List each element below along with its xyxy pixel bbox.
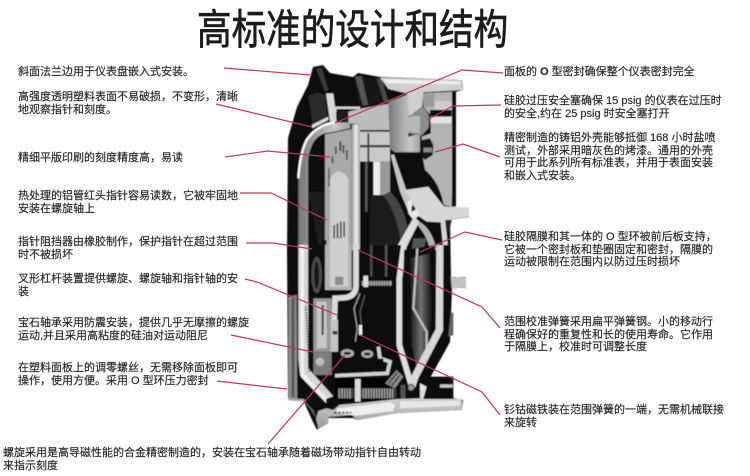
callout: overpressure plug <box>504 94 722 120</box>
grey casting <box>388 94 420 152</box>
callout: pointer <box>18 190 238 215</box>
overpressure plug <box>408 107 429 136</box>
callout: silicone diaphragm: 硅胶隔膜和其一体的 O 型环被前后板支持， <box>504 231 717 243</box>
rear wall <box>412 245 440 387</box>
callout: zero adjuster: 在塑料面板上的调零螺丝，无需移除面板即可 <box>18 362 238 374</box>
inner white tube <box>399 245 412 387</box>
leader: clear window <box>216 104 312 127</box>
gauge silhouette <box>287 65 469 430</box>
range screw <box>362 281 392 286</box>
leader: silicone diaphragm <box>420 232 502 252</box>
leader: front O-ring <box>335 70 503 123</box>
callout: range spring: 于隔膜上，校准时可调整长度 <box>504 341 647 353</box>
callout: die-cast case: 和嵌入式安装。 <box>504 170 581 182</box>
leader: zero adjuster <box>217 381 287 389</box>
pivot <box>408 384 414 391</box>
diaphragm <box>403 245 437 368</box>
callout: pointer: 热处理的铝管红头指针容易读数，它被牢固地 <box>18 190 238 202</box>
callout: silicone diaphragm: 它被一个密封板和垫圈固定和密封，隔膜的 <box>504 244 713 256</box>
callout: range spring: 范围校准弹簧采用扁平弹簧钢。小的移动行 <box>504 316 713 328</box>
lever tube <box>333 245 356 352</box>
callout: overpressure plug: 硅胶过压安全塞确保 15 psig 的仪表在过压时 <box>504 95 722 107</box>
callout: magnet: 来旋转 <box>504 417 537 429</box>
lower left shell <box>303 400 316 418</box>
leader: helix <box>268 355 345 444</box>
dial plate <box>325 129 352 250</box>
callout: helix: 来指示刻度 <box>3 460 58 472</box>
light grey ledge <box>348 103 391 130</box>
callout: fork lever: 装 <box>18 286 29 298</box>
callout: die-cast case: 可用于此系列所有标准表，并用于表面安装 <box>504 157 713 169</box>
spring brace <box>385 370 403 388</box>
L bracket <box>335 347 390 376</box>
callout: zero adjuster <box>18 362 238 387</box>
curved window <box>298 122 350 250</box>
callout: silicone diaphragm: 运动被限制在范围内以防过压时损坏 <box>504 256 680 268</box>
case fastener <box>422 138 433 160</box>
callout: jewel bearing: 运动,并且采用高粘度的硅油对运动阻尼 <box>18 330 208 342</box>
callout: die-cast case: 测试，外部采用暗灰色的烤漆。通用的外壳 <box>504 145 713 157</box>
lower case flange <box>316 383 463 429</box>
callout: range spring <box>504 316 713 353</box>
helix wire <box>354 293 360 342</box>
callout: die-cast case: 精密制造的铸铝外壳能够抵御 168 小时盐喷 <box>504 132 715 144</box>
leader: die-cast case <box>435 144 500 157</box>
window strip <box>298 245 337 403</box>
callout: lithographed scale: 精细平版印刷的刻度精度高，易读 <box>18 152 183 164</box>
rear bar <box>405 187 469 250</box>
pointer stop <box>322 240 326 250</box>
spring bed <box>335 378 398 401</box>
lower half, drawn in enlarged coordinates <box>288 245 466 429</box>
diaphragm <box>405 223 443 250</box>
callout: front O-ring: 面板的 O 型密封确保整个仪表密封完全 <box>504 66 695 78</box>
leader: pointer <box>240 193 327 220</box>
callout: fork lever: 叉形杠杆装置提供螺旋、螺旋轴和指针轴的安 <box>18 273 238 285</box>
top ring <box>353 78 387 107</box>
callout: silicone diaphragm <box>504 230 717 268</box>
upper half, drawn in enlarged coordinates <box>298 68 469 250</box>
right housing <box>422 92 455 207</box>
fork device <box>313 298 332 352</box>
leader: pointer stop <box>246 243 312 249</box>
leader: dial <box>225 151 330 157</box>
wedge edge <box>391 154 413 212</box>
mounting lug <box>443 245 466 305</box>
top flange <box>380 78 463 116</box>
callout: flange: 斜面法兰边用于仪表盘嵌入式安装。 <box>18 66 194 78</box>
lower dark cavity <box>308 245 325 298</box>
grey lower wall <box>288 295 297 399</box>
window seal <box>326 93 360 122</box>
jewel bearings <box>341 349 354 358</box>
callout: magnet: 钐钴磁铁装在范围弹簧的一端，无需机械联接 <box>504 404 724 416</box>
leader: jewel bearing <box>231 335 313 352</box>
leader: overpressure plug <box>427 105 501 120</box>
central dark chamber <box>370 195 408 250</box>
title: 高标准的设计和结构 <box>197 8 508 54</box>
leader: bezel flange <box>224 68 310 75</box>
callout: jewel bearing: 宝石轴承采用防震安装，提供几乎无摩擦的螺旋 <box>18 317 249 329</box>
callout: zero adjuster: 操作，使用方便。采用 O 型环压力密封 <box>18 375 209 387</box>
centre block <box>360 132 390 162</box>
callout: die-cast case <box>504 132 716 182</box>
leader: fork lever <box>245 279 337 315</box>
callout: helix <box>3 446 421 472</box>
callout: clear plastic: 高强度透明塑料表面不易破损，不变形，清晰 <box>18 91 238 103</box>
leader: range spring <box>358 250 500 328</box>
bezel gloss <box>308 93 327 125</box>
leader: magnet <box>360 335 500 415</box>
stripes <box>360 162 377 250</box>
callout: helix: 螺旋采用是高导磁性能的合金精密制造的，安装在宝石轴承随着磁场带动指针自由转动 <box>3 447 421 459</box>
callout: clear plastic: 地观察指针和刻度。 <box>18 104 117 116</box>
callout: pointer stop <box>18 236 238 261</box>
callout: pointer stop: 指针阻挡器由橡胶制作，保护指针在超过范围 <box>18 236 238 248</box>
pin <box>407 200 420 220</box>
callout: pointer: 安装在螺旋轴上 <box>18 203 95 215</box>
dial plate lower <box>325 245 352 290</box>
pointer strip <box>352 124 360 250</box>
callout: overpressure plug: 的安全,约在 25 psig 时安全塞打开 <box>504 108 670 120</box>
zero adjust block <box>326 396 339 410</box>
lower right <box>423 377 453 398</box>
seal seat <box>336 111 350 124</box>
callout: magnet <box>504 404 724 429</box>
callout: pointer stop: 时不被损坏 <box>18 249 73 261</box>
callout: jewel bearing <box>18 316 249 342</box>
black wedge <box>393 152 428 190</box>
callout: fork lever <box>18 272 238 298</box>
central black <box>337 245 403 372</box>
callout: range spring: 程确保好的重复性和长的使用寿命。它作用 <box>504 329 713 341</box>
window cavity <box>308 137 325 250</box>
callout: clear plastic <box>18 90 238 116</box>
